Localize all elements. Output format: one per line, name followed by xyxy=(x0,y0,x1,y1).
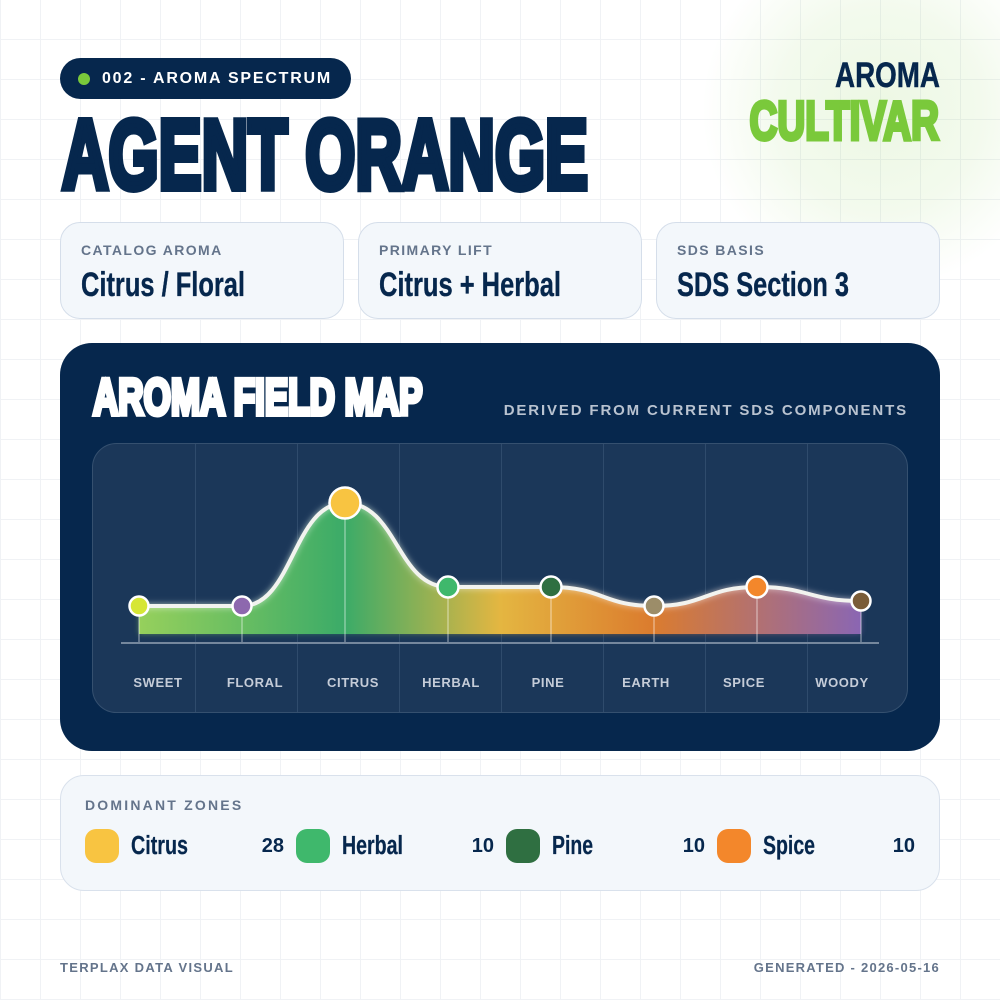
zone swatch: herbal xyxy=(296,829,330,863)
card value: sds basis: SDS Section 3 xyxy=(677,266,849,304)
badge: aroma spectrum xyxy=(60,58,351,99)
drop lines xyxy=(139,503,861,642)
axis label: floral: FLORAL xyxy=(227,675,283,690)
card: catalog aroma: CATALOG AROMA xyxy=(81,242,223,258)
zone value: herbal: 10 xyxy=(472,835,494,857)
area fill xyxy=(139,503,861,634)
panel: aroma field map xyxy=(60,343,940,751)
axis label: citrus: CITRUS xyxy=(327,675,379,690)
zone swatch: spice xyxy=(717,829,751,863)
panel: dominant zones xyxy=(60,775,940,891)
card value: catalog aroma: Citrus / Floral xyxy=(81,266,245,304)
zone name: spice: Spice xyxy=(763,832,815,860)
zone name: citrus: Citrus xyxy=(131,832,188,860)
axis label: earth: EARTH xyxy=(622,675,670,690)
card: catalog aroma xyxy=(60,222,344,319)
axis label: herbal: HERBAL xyxy=(422,675,480,690)
card: primary lift xyxy=(358,222,642,319)
brand word: aroma: AROMA xyxy=(835,56,940,95)
axis label: sweet: SWEET xyxy=(133,675,183,690)
data points xyxy=(130,488,870,616)
zone swatch: citrus xyxy=(85,829,119,863)
axis xyxy=(121,642,879,644)
axis label: spice: SPICE xyxy=(723,675,765,690)
badge: aroma spectrum: 002 - AROMA SPECTRUM xyxy=(102,70,332,87)
zone value: spice: 10 xyxy=(893,835,915,857)
card value: primary lift: Citrus + Herbal xyxy=(379,266,561,304)
panel heading: AROMA FIELD MAP xyxy=(93,368,422,426)
zone value: pine: 10 xyxy=(683,835,705,857)
footer: right: GENERATED - 2026-05-16 xyxy=(754,960,940,975)
card: primary lift: PRIMARY LIFT xyxy=(379,242,493,258)
footer: left: TERPLAX DATA VISUAL xyxy=(60,960,234,975)
zone value: citrus: 28 xyxy=(262,835,284,857)
curve line xyxy=(139,503,861,606)
axis label: pine: PINE xyxy=(532,675,564,690)
title: AGENT ORANGE xyxy=(62,100,588,210)
zone name: pine: Pine xyxy=(552,832,593,860)
zone swatch: pine xyxy=(506,829,540,863)
zone name: herbal: Herbal xyxy=(342,832,403,860)
panel subtitle: DERIVED FROM CURRENT SDS COMPONENTS xyxy=(504,402,908,419)
plot background xyxy=(92,444,908,712)
axis label: woody: WOODY xyxy=(815,675,869,690)
zones heading: DOMINANT ZONES xyxy=(85,797,243,813)
card: sds basis xyxy=(656,222,940,319)
card: sds basis: SDS BASIS xyxy=(677,242,765,258)
